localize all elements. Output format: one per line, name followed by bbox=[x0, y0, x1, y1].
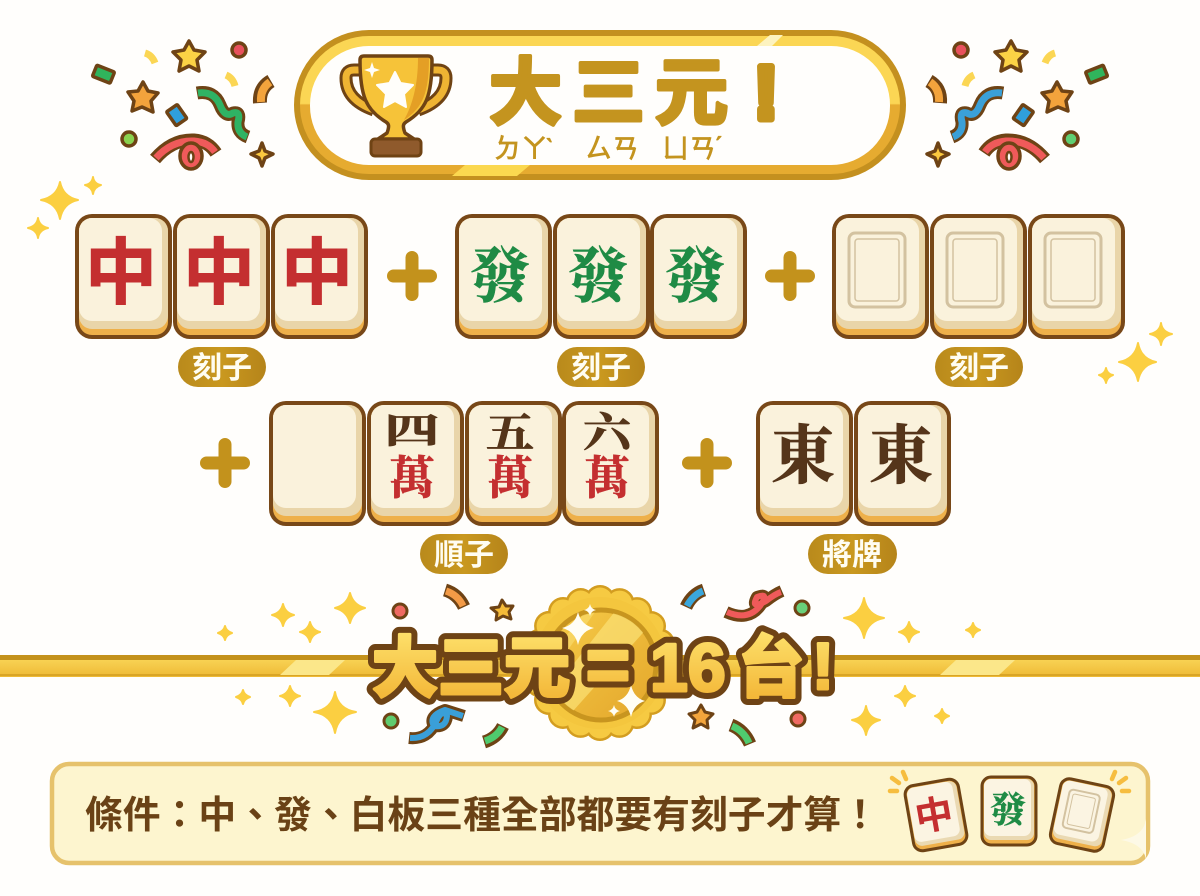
score text: 大三元 bbox=[372, 631, 570, 705]
score text: = bbox=[586, 623, 630, 708]
small tile: 發: 發 bbox=[990, 790, 1026, 830]
panel: condition bbox=[52, 764, 1148, 863]
tile: 發: 發 bbox=[665, 244, 725, 310]
tile: 發: 發 bbox=[568, 244, 628, 310]
small tile: 中: 中 bbox=[912, 792, 957, 840]
small tile: 中 bbox=[904, 778, 968, 852]
bopomofo: ˊ bbox=[714, 132, 723, 162]
score text: ! bbox=[812, 629, 834, 703]
label: 順子: 順子 bbox=[434, 539, 494, 572]
tile: white dragon bbox=[930, 214, 1027, 339]
condition text: 條件：中、發、白板三種全部都要有刻子才算！ bbox=[85, 784, 879, 839]
tile: 發 bbox=[650, 214, 747, 339]
tile: blank bbox=[269, 401, 366, 526]
score text bbox=[372, 623, 834, 708]
score text: 台 bbox=[738, 631, 804, 705]
tile: 五萬: 五 bbox=[486, 410, 534, 456]
label: 刻子: 刻子 bbox=[571, 352, 631, 385]
label: 刻子 bbox=[935, 347, 1023, 387]
plus bbox=[688, 444, 726, 482]
score text: 16 bbox=[650, 630, 726, 706]
bopomofo: ˋ bbox=[545, 134, 554, 164]
sparkles: upper corners bbox=[28, 177, 1172, 383]
tile: 中 bbox=[75, 214, 172, 339]
label: 將牌: 將牌 bbox=[822, 539, 882, 572]
tile: 東 bbox=[756, 401, 853, 526]
tile: 中 bbox=[173, 214, 270, 339]
tile: white dragon bbox=[832, 214, 929, 339]
icon: trophy bbox=[346, 56, 446, 156]
score text: = bbox=[586, 623, 630, 708]
tile: 六萬: 萬 bbox=[584, 453, 630, 504]
tiles: sequence set bbox=[269, 401, 659, 526]
plus bbox=[206, 444, 244, 482]
tile: 五萬 bbox=[465, 401, 562, 526]
tiles: red dragon set bbox=[75, 214, 368, 339]
tile: white dragon bbox=[1028, 214, 1125, 339]
tile: 中: 中 bbox=[85, 234, 157, 314]
tile: 六萬 bbox=[562, 401, 659, 526]
score text: 台 bbox=[738, 631, 804, 705]
score text: 16 bbox=[650, 630, 726, 706]
confetti: top left bbox=[92, 41, 273, 169]
tile: 東 bbox=[854, 401, 951, 526]
small tile: 發 bbox=[982, 777, 1036, 845]
exclamation mark: ! bbox=[753, 51, 779, 136]
tile: 東: 東 bbox=[869, 421, 933, 492]
label: 刻子: 刻子 bbox=[949, 352, 1009, 385]
tile: 發: 發 bbox=[470, 244, 530, 310]
sparkles and confetti around score bbox=[218, 590, 980, 744]
label: 刻子 bbox=[178, 347, 266, 387]
plus bbox=[772, 258, 808, 294]
label: 將牌 bbox=[808, 534, 897, 574]
tiles: green dragon set bbox=[455, 214, 747, 339]
tile: 五萬: 萬 bbox=[487, 453, 533, 504]
tile: 中 bbox=[271, 214, 368, 339]
label: 順子 bbox=[420, 534, 508, 574]
title text: 大三元 bbox=[489, 53, 738, 134]
score text: 大三元 bbox=[372, 631, 570, 705]
shine marks bbox=[890, 772, 1129, 791]
plus bbox=[394, 258, 430, 294]
label: 刻子: 刻子 bbox=[192, 352, 252, 385]
bopomofo: ㄉㄚ bbox=[494, 134, 548, 164]
tile: 中: 中 bbox=[281, 234, 353, 314]
bopomofo: ㄩㄢ bbox=[662, 134, 716, 164]
tiles: white dragon set bbox=[832, 214, 1125, 339]
small tile: white dragon bbox=[1049, 777, 1115, 853]
tile: 中: 中 bbox=[183, 234, 255, 314]
gold ribbon band bbox=[0, 655, 1200, 677]
bopomofo: ㄙㄢ bbox=[585, 134, 639, 164]
tile: 發 bbox=[553, 214, 650, 339]
title banner bbox=[297, 33, 903, 177]
tile: 四萬: 四 bbox=[384, 412, 440, 451]
tile: 東: 東 bbox=[771, 421, 835, 492]
medal bbox=[534, 597, 666, 729]
score text: ! bbox=[812, 629, 834, 703]
tile: 四萬 bbox=[367, 401, 464, 526]
tile: 發 bbox=[455, 214, 552, 339]
tile: 六萬: 六 bbox=[583, 410, 635, 456]
bopomofo bbox=[494, 132, 723, 164]
confetti: top right bbox=[927, 41, 1108, 169]
tile: 四萬: 萬 bbox=[389, 453, 435, 504]
label: 刻子 bbox=[557, 347, 645, 387]
tiles: pair bbox=[756, 401, 951, 526]
